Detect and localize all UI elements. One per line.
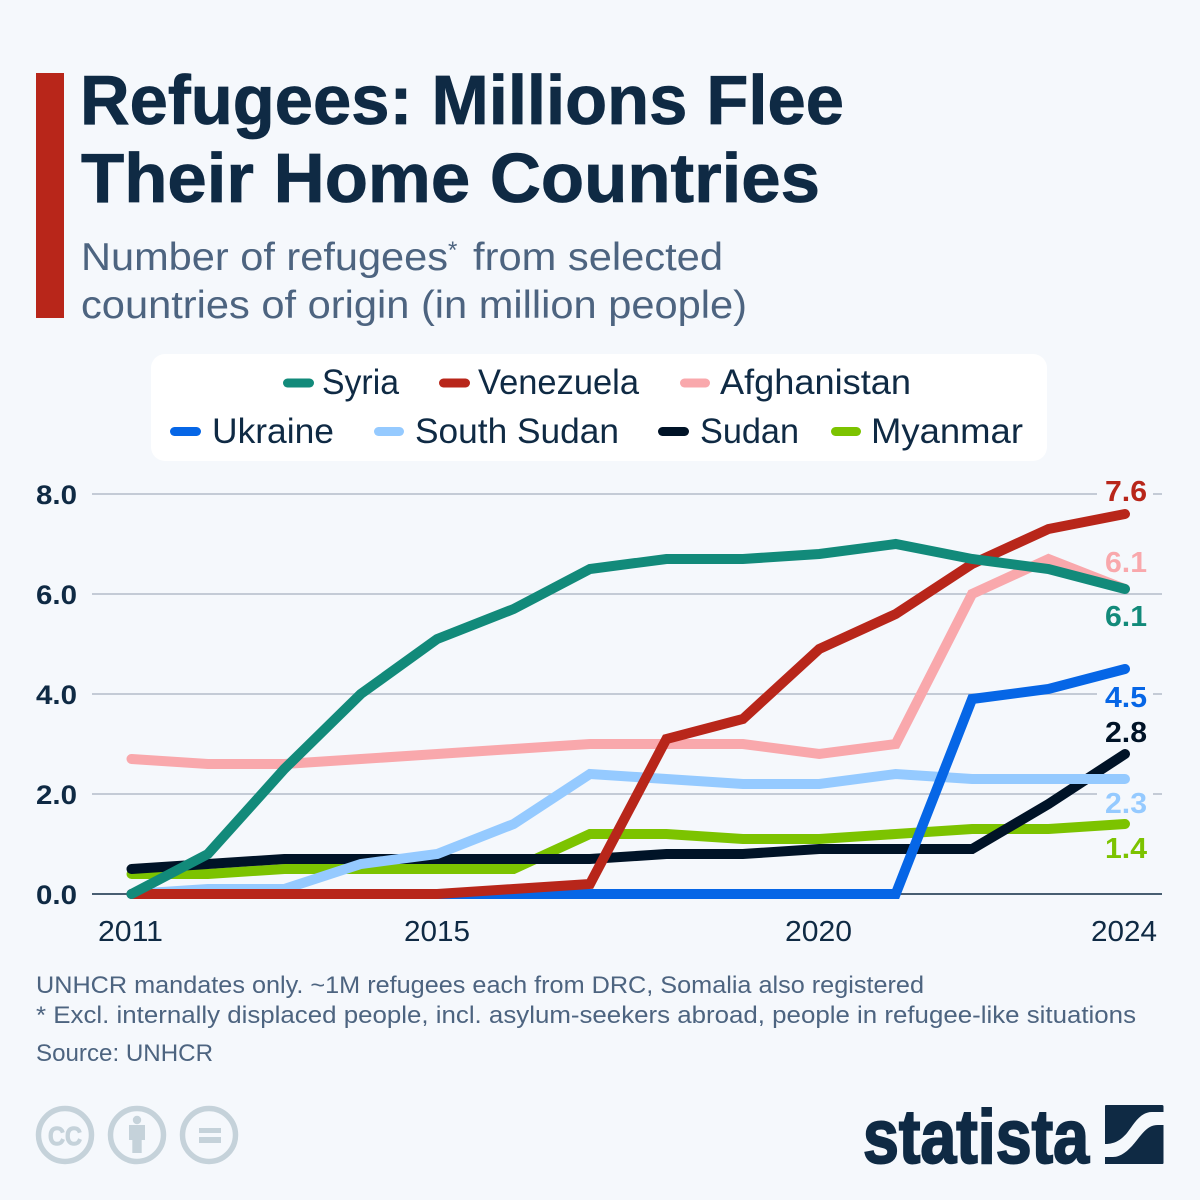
value labels: 2.8 [1105, 717, 1147, 749]
line: Ukraine [132, 669, 1125, 894]
subtitle: countries of origin (in million people) [81, 284, 747, 327]
legend item: South Sudan: South Sudan [415, 412, 619, 451]
y axis labels [36, 480, 77, 910]
subtitle: Number of refugees [81, 236, 448, 279]
value labels [1105, 476, 1147, 865]
y axis labels: 4.0 [36, 680, 77, 710]
value labels: 4.5 [1105, 682, 1147, 714]
footnotes: * Excl. internally displaced people, incl. asylum-seekers abroad, people in refugee-like situations [36, 1002, 1136, 1029]
title [80, 61, 844, 217]
accent bar [36, 73, 64, 318]
legend item: Myanmar: Myanmar [871, 412, 1023, 451]
y axis labels: 0.0 [36, 880, 77, 910]
icon: creative commons: CC [48, 1121, 82, 1151]
y axis labels: 2.0 [36, 780, 77, 810]
icon: attribution [110, 1108, 164, 1162]
icon: no derivatives [182, 1108, 236, 1162]
title: Their Home Countries [81, 139, 820, 217]
line: Venezuela [132, 514, 1125, 894]
y axis labels: 6.0 [36, 580, 77, 610]
legend item: Afghanistan: Afghanistan [720, 363, 911, 402]
legend item: Ukraine: Ukraine [212, 412, 334, 451]
subtitle [81, 236, 747, 327]
value labels: 6.1 [1105, 601, 1147, 633]
legend item: Venezuela: Venezuela [478, 363, 640, 402]
footnotes [36, 972, 1136, 1067]
line: Sudan [132, 754, 1125, 869]
line: Syria [132, 544, 1125, 894]
legend item: Syria [283, 363, 400, 402]
subtitle: from selected [473, 236, 723, 279]
title: Refugees: Millions Flee [80, 61, 844, 139]
value labels: 2.3 [1105, 788, 1147, 820]
legend item: Syria: Syria [322, 363, 400, 402]
subtitle: * [448, 237, 457, 264]
footnotes: UNHCR mandates only. ~1M refugees each from DRC, Somalia also registered [36, 972, 924, 999]
y axis labels: 8.0 [36, 480, 77, 510]
legend item: Sudan [658, 412, 799, 451]
x axis labels: 2020 [785, 916, 852, 948]
value labels: 6.1 [1105, 547, 1147, 579]
legend item: Sudan: Sudan [700, 412, 799, 451]
value labels: 1.4 [1105, 833, 1147, 865]
footnotes: Source: UNHCR [36, 1040, 213, 1067]
x axis labels [98, 916, 1157, 948]
legend [151, 354, 1047, 461]
line chart [36, 476, 1162, 948]
statista logo: statista [863, 1095, 1090, 1180]
x axis labels: 2015 [404, 916, 470, 948]
line: South Sudan [132, 774, 1125, 894]
x axis labels: 2024 [1091, 916, 1157, 948]
icon: statista mark [1105, 1105, 1164, 1164]
line: Afghanistan [132, 559, 1125, 764]
value labels: 7.6 [1105, 476, 1147, 508]
line: Myanmar [132, 824, 1125, 874]
icon: creative commons [38, 1108, 92, 1162]
x axis labels: 2011 [98, 916, 163, 948]
